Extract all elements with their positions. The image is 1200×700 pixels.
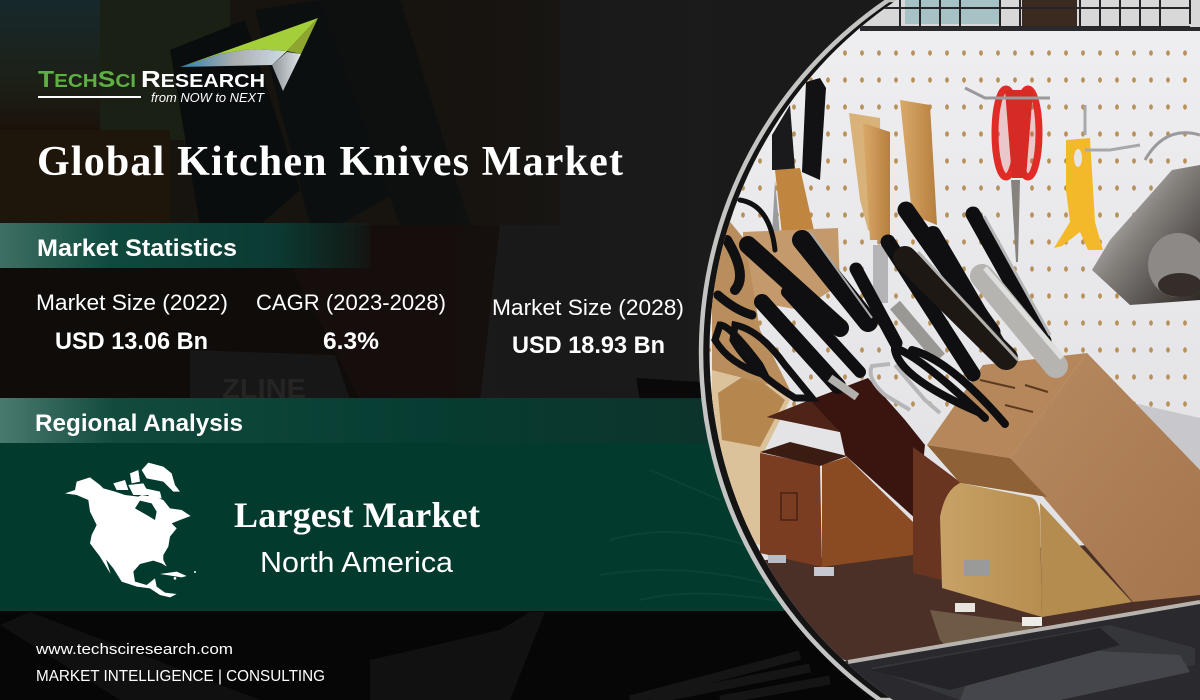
- stat: CAGR: 6.3%: [323, 328, 379, 355]
- heading: regional analysis: Regional Analysis: [35, 410, 243, 437]
- panel: regional analysis band: [0, 398, 720, 443]
- title: Global Kitchen Knives Market: [37, 139, 623, 185]
- left wood blocks: [712, 200, 790, 545]
- counter top: [764, 545, 1200, 661]
- yellow peeler: [1054, 105, 1140, 250]
- stat: market size 2028: USD 18.93 Bn: [512, 332, 665, 359]
- stat: market size 2028: Market Size (2028): [492, 295, 684, 320]
- logo: TechSci Research: TECHSCI: [38, 66, 136, 92]
- logo: TechSci Research: RESEARCH: [141, 66, 265, 92]
- panel: market statistics band: [0, 223, 370, 268]
- icon: north america map: [65, 463, 196, 597]
- logo: TechSci Research: [38, 18, 318, 105]
- stat: market size 2028: [492, 295, 684, 359]
- footer: website and tagline: MARKET INTELLIGENCE | CONSULTING: [36, 668, 325, 685]
- stat: CAGR: [256, 290, 446, 355]
- photo: knife blocks on a pegboard kitchen wall: [700, 0, 1200, 700]
- stat: market size 2022: Market Size (2022): [36, 290, 228, 315]
- callout: largest market: North America: [260, 547, 454, 579]
- callout: largest market: Largest Market: [234, 495, 480, 535]
- logo: TechSci Research: from NOW to NEXT: [151, 90, 265, 105]
- panel: regional body: [0, 443, 820, 611]
- stove and steel edge: [840, 602, 1200, 700]
- heading: market statistics: Market Statistics: [37, 235, 237, 262]
- ring: circular photo border: [701, 0, 1200, 700]
- footer: website and tagline: [35, 641, 325, 685]
- stat: market size 2022: [36, 290, 228, 355]
- light wood knife block: [927, 353, 1200, 626]
- steel measuring cups: [1092, 133, 1200, 305]
- dark zwilling knife block: [760, 378, 960, 580]
- black knife handles and scissors: [715, 200, 1062, 424]
- callout: largest market: [234, 495, 480, 579]
- rear knives: [743, 78, 937, 310]
- background: dark kitchen photo: ZLINE: [222, 373, 306, 404]
- stat: CAGR: CAGR (2023-2028): [256, 290, 446, 315]
- stat: market size 2022: USD 13.06 Bn: [55, 328, 208, 355]
- lower wall and steel backsplash: [1136, 404, 1200, 470]
- shelf: [860, 0, 1200, 31]
- footer: website and tagline: www.techsciresearch.com: [35, 641, 233, 658]
- red scissors: [965, 88, 1050, 262]
